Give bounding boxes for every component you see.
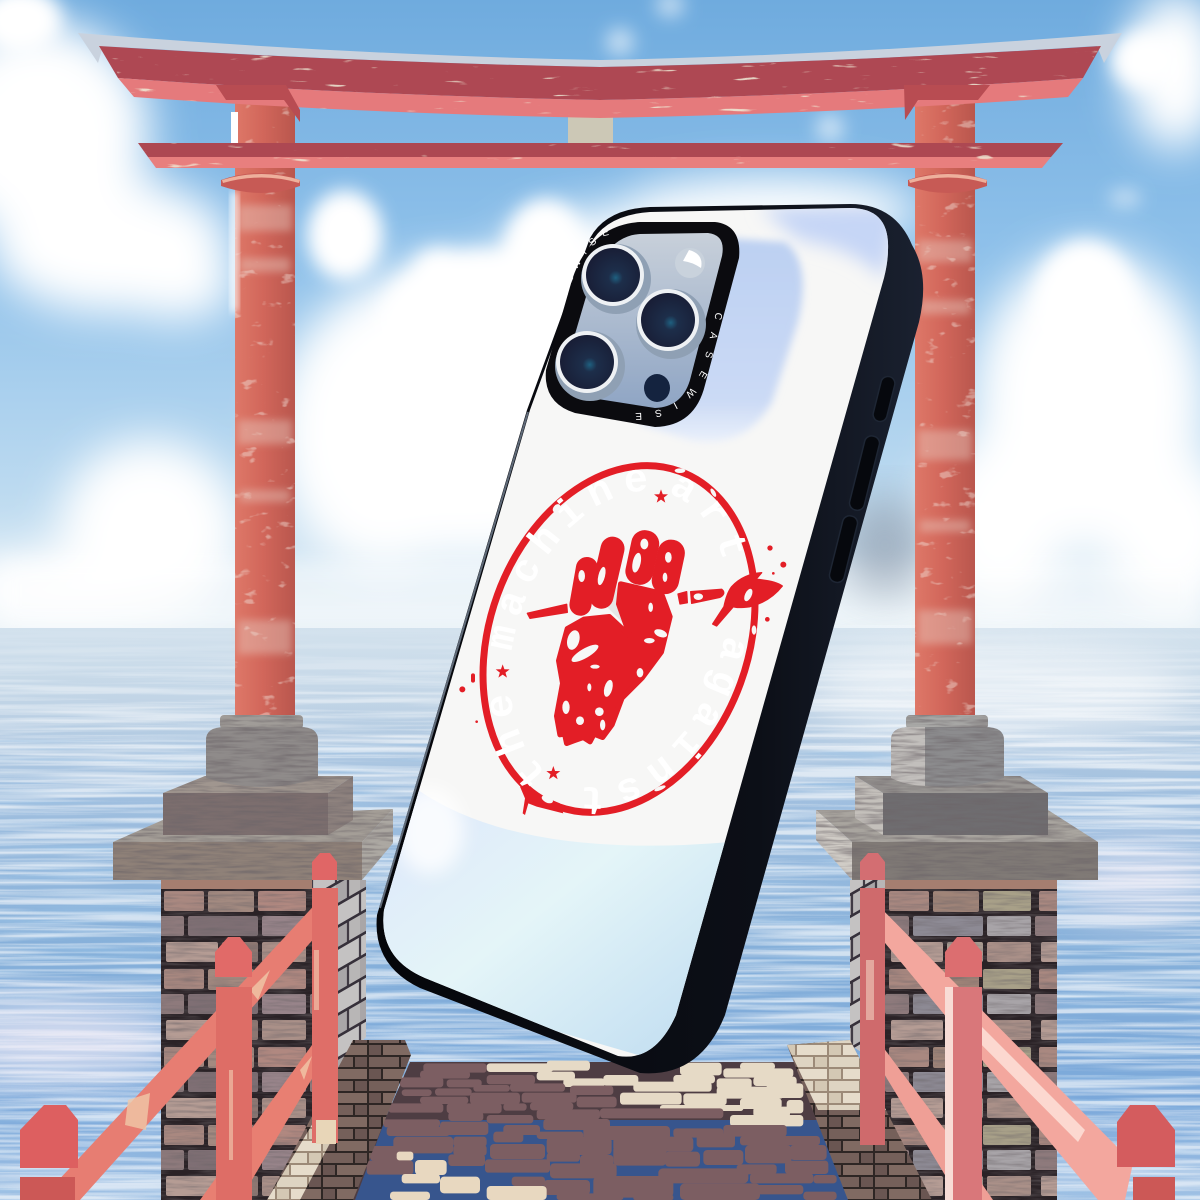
fist [557, 528, 687, 743]
ring text: the [490, 696, 541, 786]
post 1 [860, 853, 885, 1145]
right pillar lower collar [908, 173, 987, 193]
thin case highlight on left edge [380, 412, 528, 908]
pavement base [350, 1062, 850, 1200]
fist speckles [540, 468, 756, 805]
cobblestone path [267, 1040, 932, 1200]
clouds [0, 0, 1200, 628]
left pillar lower collar [221, 173, 300, 193]
top rail [40, 897, 335, 1200]
main lens [581, 244, 651, 314]
sky background [0, 0, 1200, 630]
side buttons [828, 375, 896, 584]
lower rail [200, 1027, 335, 1200]
wide lens [555, 331, 625, 401]
pavement stones [367, 1061, 837, 1200]
lidar sensor [644, 374, 670, 402]
top beam [78, 33, 1122, 118]
post 3 [20, 1105, 78, 1200]
right curb [787, 1040, 932, 1200]
right stone base [816, 715, 1098, 1200]
ring text [490, 470, 746, 814]
camera plate [546, 222, 739, 427]
ring text: machine [491, 470, 646, 650]
left pillar [231, 100, 295, 720]
red stamp logo [459, 462, 786, 816]
brand text: CASEWISE lower right: CASEWISE [636, 313, 722, 420]
torii gate [78, 33, 1122, 720]
right pillar [915, 100, 975, 720]
brush handle and head [460, 546, 786, 722]
ring drip [520, 787, 563, 815]
stamp ring [436, 427, 802, 851]
flash [675, 248, 705, 278]
pillar tie blocks [216, 85, 990, 122]
left curb [267, 1040, 411, 1200]
post 2 [215, 937, 252, 1200]
left railing [20, 853, 338, 1200]
post 3 [1117, 1105, 1175, 1200]
cloud shadow behind phone [843, 495, 927, 595]
sea [0, 628, 1200, 1200]
phone case [376, 204, 924, 1074]
post 1 [312, 853, 338, 1144]
back face [383, 208, 888, 1057]
face reflections [372, 205, 900, 1070]
left stone base [113, 715, 393, 1200]
post 2 [945, 937, 982, 1200]
right railing [860, 853, 1175, 1200]
ring text: art [672, 478, 746, 556]
brand text: CASEWISE upper left: CASEWISE [568, 228, 609, 295]
stars [496, 489, 668, 779]
case body [377, 204, 923, 1073]
water between stones [355, 1120, 850, 1200]
top rail [866, 895, 1133, 1200]
centre tie post [568, 104, 613, 143]
tele lens [636, 289, 706, 359]
ring text: against [584, 638, 744, 814]
lower beam [138, 143, 1063, 168]
lower rail [868, 1027, 993, 1200]
